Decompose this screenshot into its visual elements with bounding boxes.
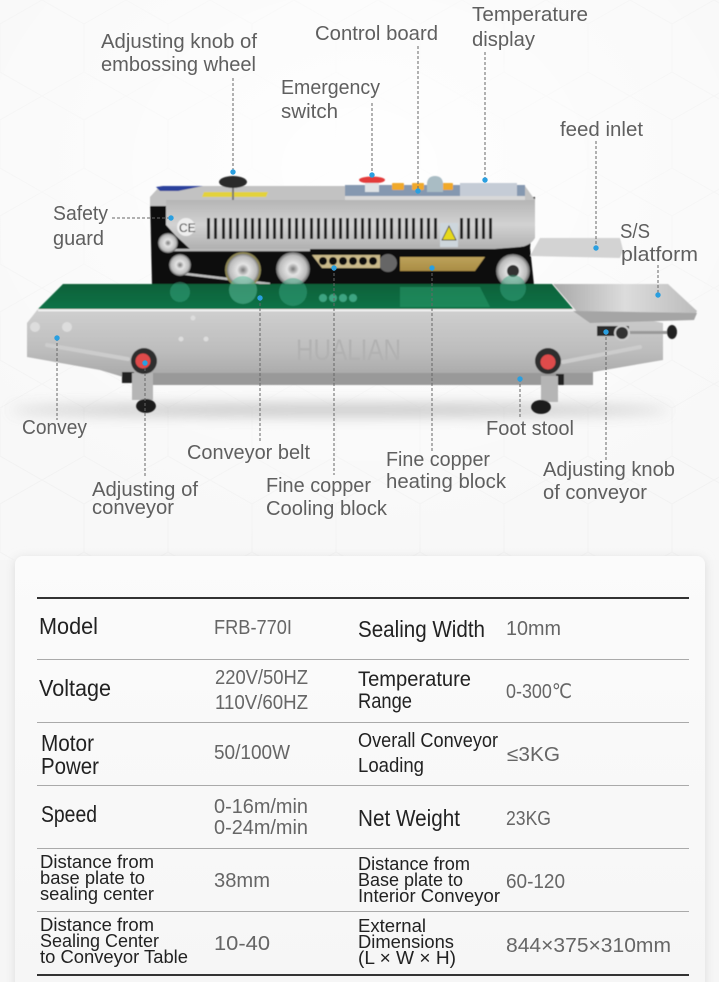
- row: speed and net weight: Net Weight: [358, 805, 461, 831]
- row: voltage and temperature range: Range: [358, 690, 412, 713]
- callout: foot stool: [486, 376, 574, 440]
- callout: S/S platform: platform: [621, 243, 698, 266]
- row: base plate distances: Distance from: [40, 851, 154, 872]
- conveyor adjusting knob: [597, 325, 677, 340]
- callout: fine copper cooling block: Cooling block: [266, 497, 388, 520]
- callout: fine copper cooling block: Fine copper: [266, 474, 371, 497]
- callout: safety guard: guard: [53, 227, 104, 250]
- row: motor power and conveyor loading: ≤3KG: [507, 744, 560, 766]
- row: speed and net weight: [41, 796, 551, 839]
- machine: band sealer: [10, 176, 697, 415]
- fine copper cooling block: [312, 255, 380, 268]
- callout: feed inlet: feed inlet: [560, 118, 643, 141]
- callout: adjusting knob of conveyor: [543, 329, 675, 504]
- row: model and sealing width: 10mm: [506, 618, 561, 640]
- row: conveyor table distance and external dimensions: Dimensions: [358, 931, 454, 952]
- left foot: [122, 348, 157, 413]
- callout: adjusting of conveyor: conveyor: [92, 496, 174, 519]
- row: speed and net weight: 23KG: [506, 808, 551, 830]
- embossed logo: HUALIAN: [296, 334, 401, 367]
- row: model and sealing width: FRB-770I: [214, 617, 292, 639]
- row: conveyor table distance and external dimensions: 844×375×310mm: [506, 935, 671, 957]
- callout: fine copper heating block: [386, 265, 507, 493]
- callout: convey: Convey: [22, 416, 88, 439]
- row: voltage and temperature range: [39, 667, 572, 714]
- green conveyor belt: [38, 275, 576, 312]
- row: base plate distances: Distance from: [358, 853, 470, 874]
- row: conveyor table distance and external dimensions: External: [358, 915, 426, 936]
- conveyor steel body: [27, 309, 663, 385]
- callout: conveyor belt: [187, 295, 310, 464]
- warning sticker: [440, 223, 458, 247]
- callout: emergency switch: Emergency: [281, 76, 381, 99]
- callout: adjusting of conveyor: Adjusting of: [92, 478, 198, 501]
- callout: S/S platform: [620, 220, 698, 298]
- blue corner logo: [156, 186, 203, 191]
- callout: adjusting knob of conveyor: of conveyor: [543, 481, 647, 504]
- callout: fine copper heating block: heating block: [386, 470, 507, 493]
- callout: adjusting knob of embossing wheel: [101, 30, 257, 175]
- conveyor rivets: [30, 316, 208, 342]
- callout: fine copper heating block: Fine copper: [386, 448, 490, 471]
- row: motor power and conveyor loading: Power: [41, 753, 99, 779]
- callout: safety guard: [53, 202, 174, 250]
- callout: foot stool: Foot stool: [486, 417, 574, 440]
- row: voltage and temperature range: 110V/60HZ: [215, 692, 308, 714]
- right foot: [531, 348, 564, 414]
- callout: conveyor belt: Conveyor belt: [187, 441, 310, 464]
- stainless platform: [553, 284, 697, 323]
- row: speed and net weight: 0-16m/min: [214, 796, 308, 818]
- CE mark: [177, 218, 196, 236]
- ground shadow: [10, 405, 670, 415]
- row: conveyor table distance and external dimensions: Distance from: [40, 914, 154, 935]
- row: voltage and temperature range: 220V/50HZ: [215, 667, 308, 689]
- panel shadow: [15, 558, 705, 982]
- right handle: [563, 347, 640, 362]
- callout: safety guard: Safety: [53, 202, 109, 225]
- yellow warning labels: [202, 192, 268, 197]
- callout: adjusting knob of embossing wheel: embossing wheel: [101, 53, 256, 76]
- callout: temperature display: display: [472, 28, 536, 51]
- steel safety guard: [166, 200, 535, 249]
- row: model and sealing width: Model: [39, 613, 98, 639]
- row: motor power and conveyor loading: [41, 730, 560, 779]
- left handle: [47, 345, 128, 359]
- callout: temperature display: [472, 3, 588, 183]
- row: conveyor table distance and external dimensions: [40, 914, 671, 968]
- callout: S/S platform: S/S: [620, 220, 650, 243]
- callout: feed inlet: [560, 118, 643, 251]
- table rules: [37, 597, 689, 976]
- callout: convey: [22, 335, 88, 439]
- row: base plate distances: Base plate to: [358, 869, 463, 890]
- row: voltage and temperature range: 0-300℃: [506, 681, 572, 703]
- row: base plate distances: 38mm: [214, 870, 270, 892]
- row: voltage and temperature range: Temperature: [358, 668, 471, 691]
- row: conveyor table distance and external dimensions: to Conveyor Table: [40, 946, 188, 967]
- row: base plate distances: Interior Conveyor: [358, 885, 500, 906]
- row: motor power and conveyor loading: Motor: [41, 730, 94, 756]
- ventilation slots: [207, 218, 492, 239]
- CE mark: CE: [179, 221, 196, 235]
- head top cover: [150, 186, 535, 206]
- body bottom edge: [150, 373, 593, 385]
- callout: fine copper cooling block: [266, 265, 388, 520]
- row: conveyor table distance and external dimensions: 10-40: [214, 933, 270, 955]
- row: motor power and conveyor loading: 50/100W: [214, 742, 290, 764]
- machine head black back plate: [150, 197, 535, 285]
- row: base plate distances: 60-120: [506, 871, 565, 893]
- embossing wheel knob: [219, 176, 247, 200]
- row: conveyor table distance and external dimensions: Sealing Center: [40, 930, 159, 951]
- row: conveyor table distance and external dimensions: (L × W × H): [358, 947, 456, 968]
- row: base plate distances: base plate to: [40, 867, 145, 888]
- callout: emergency switch: [281, 76, 381, 178]
- row: model and sealing width: Sealing Width: [358, 616, 485, 642]
- fine copper heating block: [400, 257, 485, 271]
- callout: adjusting knob of conveyor: Adjusting knob: [543, 458, 675, 481]
- panel background: [15, 556, 705, 982]
- callout: temperature display: Temperature: [472, 3, 588, 26]
- side feed platform: [530, 238, 623, 258]
- rollers: [158, 233, 530, 288]
- callout: adjusting of conveyor: [92, 360, 198, 519]
- row: model and sealing width: [39, 613, 561, 642]
- row: voltage and temperature range: Voltage: [39, 675, 111, 701]
- callout: control board: [315, 22, 438, 194]
- callout: control board: Control board: [315, 22, 438, 45]
- drive belt: [170, 250, 310, 284]
- row: motor power and conveyor loading: Loading: [358, 755, 424, 777]
- row: base plate distances: sealing center: [40, 883, 154, 904]
- row: speed and net weight: 0-24m/min: [214, 817, 308, 839]
- callout: adjusting knob of embossing wheel: Adjusting knob of: [101, 30, 257, 53]
- control panel: [345, 176, 525, 200]
- row: speed and net weight: Speed: [41, 801, 97, 827]
- row: base plate distances: [40, 851, 565, 906]
- panel: specification table: [15, 556, 705, 982]
- row: motor power and conveyor loading: Overall Conveyor: [358, 730, 498, 752]
- callout: emergency switch: switch: [281, 100, 338, 123]
